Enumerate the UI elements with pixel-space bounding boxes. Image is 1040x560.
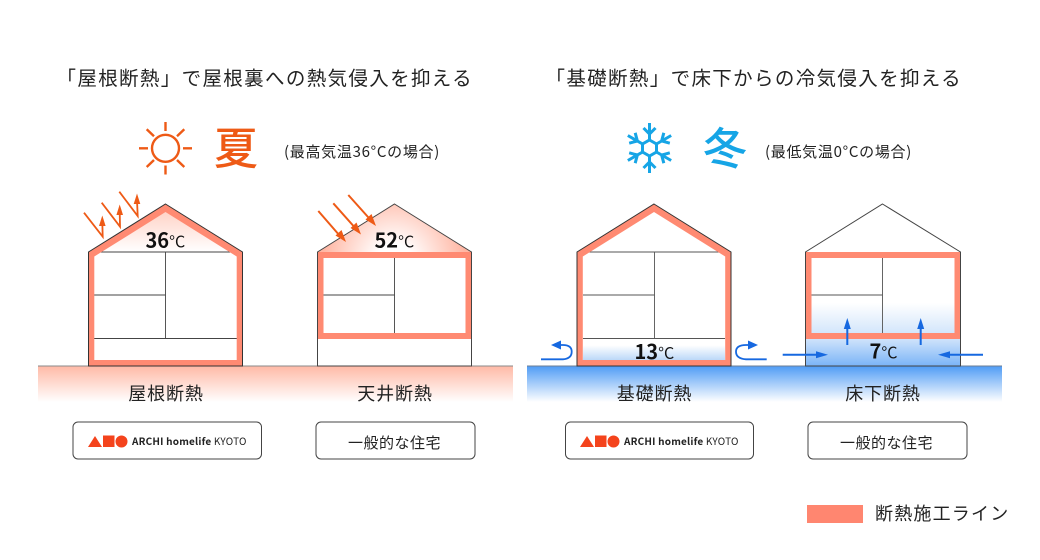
label: floor insulation: 床下断熱 bbox=[845, 380, 921, 406]
house: ceiling insulation summer bbox=[318, 195, 472, 366]
icon: cold air arrows bbox=[783, 318, 983, 358]
text: temperature 52: 52°C bbox=[374, 224, 414, 254]
heading: summer: 夏 bbox=[214, 113, 258, 177]
ground: summer bbox=[38, 366, 513, 402]
badge: typical house summer: 一般的な住宅 bbox=[348, 432, 441, 453]
house: roof insulation summer bbox=[84, 192, 242, 366]
label: roof insulation: 屋根断熱 bbox=[128, 380, 204, 406]
text: temperature 13: 13°C bbox=[634, 336, 674, 365]
title: winter heading: 「基礎断熱」で床下からの冷気侵入を抑える bbox=[546, 62, 962, 91]
heading: winter: 冬 bbox=[703, 113, 747, 177]
text: winter condition: (最低気温0°Cの場合) bbox=[765, 141, 912, 162]
badge: typical house winter: 一般的な住宅 bbox=[840, 432, 933, 453]
badge: typical house summer bbox=[316, 422, 475, 459]
label: foundation insulation: 基礎断熱 bbox=[617, 380, 692, 406]
text: summer condition: (最高気温36°Cの場合) bbox=[284, 141, 440, 162]
legend: insulation line: 断熱施工ライン bbox=[875, 500, 1009, 526]
label: ceiling insulation: 天井断熱 bbox=[357, 380, 433, 406]
text: temperature 7: 7°C bbox=[870, 336, 897, 364]
icon: sun rays reflected bbox=[84, 192, 140, 237]
icon: cold air left bbox=[541, 340, 572, 359]
icon: snowflake bbox=[625, 123, 674, 173]
icon: sun rays entering bbox=[318, 195, 376, 242]
icon: cold air right bbox=[736, 340, 767, 359]
badge: ARCHI homelife KYOTO winter bbox=[566, 422, 754, 459]
legend: insulation line bbox=[807, 500, 1009, 526]
icon: sun bbox=[139, 122, 192, 174]
badge: ARCHI homelife KYOTO winter: ARCHI homelife KYOTO bbox=[623, 433, 739, 448]
badge: typical house winter bbox=[808, 422, 967, 459]
text: temperature 36: 36°C bbox=[146, 224, 185, 254]
title: summer heading: 「屋根断熱」で屋根裏への熱気侵入を抑える bbox=[56, 62, 473, 91]
badge: ARCHI homelife KYOTO summer: ARCHI homelife KYOTO bbox=[131, 433, 247, 448]
badge: ARCHI homelife KYOTO summer bbox=[73, 422, 262, 459]
ground: winter bbox=[527, 366, 1002, 402]
house: foundation insulation winter bbox=[541, 204, 767, 366]
house: floor insulation winter bbox=[783, 204, 983, 366]
